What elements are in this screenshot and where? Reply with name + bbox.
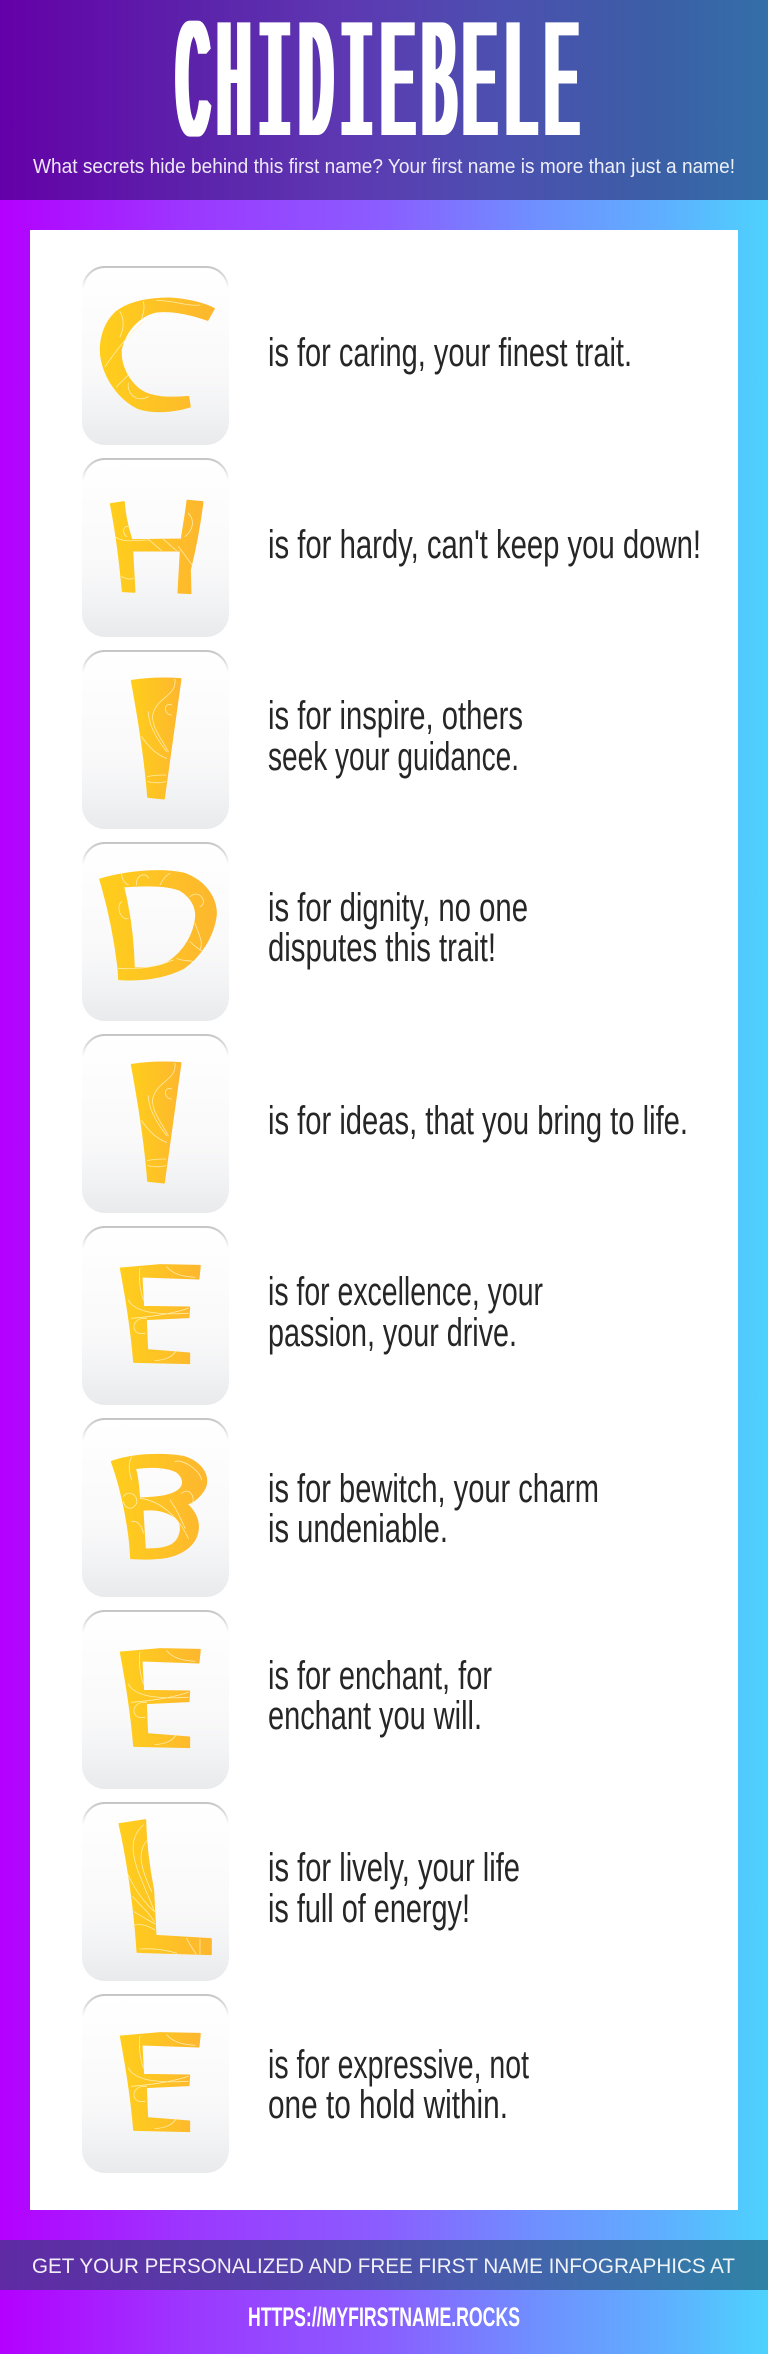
text bbox=[268, 694, 523, 779]
header band bbox=[0, 0, 768, 200]
text: one to hold within. bbox=[268, 2083, 508, 2127]
text bbox=[268, 1270, 543, 1355]
row E bbox=[82, 1611, 492, 1789]
row E bbox=[82, 1227, 543, 1405]
row H bbox=[82, 459, 701, 637]
text: is for excellence, your bbox=[268, 1270, 543, 1314]
footer url: HTTPS://MYFIRSTNAME.ROCKS bbox=[248, 2302, 520, 2332]
row E bbox=[82, 1995, 529, 2173]
card bbox=[82, 651, 229, 829]
text: disputes this trait! bbox=[268, 926, 496, 970]
row B bbox=[82, 1419, 599, 1597]
text: is for caring, your finest trait. bbox=[268, 331, 632, 375]
card bbox=[82, 1803, 229, 1981]
text bbox=[268, 886, 528, 970]
letter H bbox=[111, 501, 203, 593]
card bbox=[82, 1227, 229, 1405]
text bbox=[268, 1654, 492, 1738]
text: is undeniable. bbox=[268, 1507, 448, 1551]
letter I bbox=[132, 678, 181, 799]
row L bbox=[82, 1803, 520, 1981]
card bbox=[82, 1611, 229, 1789]
text: is for expressive, not bbox=[268, 2043, 529, 2087]
card bbox=[82, 1035, 229, 1213]
card bbox=[82, 267, 229, 445]
card bbox=[82, 459, 229, 637]
letter D bbox=[100, 871, 216, 980]
subtitle: What secrets hide behind this first name? Your first name is more than just a name! bbox=[33, 155, 735, 178]
letter E bbox=[121, 2033, 200, 2131]
card bbox=[82, 843, 229, 1021]
card bbox=[82, 1419, 229, 1597]
row D bbox=[82, 843, 528, 1021]
letter L bbox=[119, 1820, 211, 1954]
row C bbox=[82, 267, 632, 445]
text: is for inspire, others bbox=[268, 694, 523, 738]
text: is for dignity, no one bbox=[268, 886, 528, 930]
text bbox=[268, 1467, 599, 1551]
row I bbox=[82, 1035, 688, 1213]
letter C bbox=[101, 298, 214, 411]
footer text: GET YOUR PERSONALIZED AND FREE FIRST NAME INFOGRAPHICS AT bbox=[32, 2254, 735, 2278]
text: is for bewitch, your charm bbox=[268, 1467, 599, 1511]
text: passion, your drive. bbox=[268, 1311, 517, 1355]
text bbox=[268, 2043, 529, 2127]
row I bbox=[82, 651, 523, 829]
text bbox=[268, 1846, 520, 1931]
letter I bbox=[132, 1062, 181, 1183]
letter E bbox=[121, 1649, 200, 1747]
card bbox=[82, 1995, 229, 2173]
text: is full of energy! bbox=[268, 1887, 470, 1931]
text: enchant you will. bbox=[268, 1694, 482, 1738]
text: is for lively, your life bbox=[268, 1846, 520, 1890]
white content panel bbox=[30, 230, 738, 2210]
letter B bbox=[112, 1455, 206, 1559]
letter E bbox=[121, 1265, 200, 1363]
text: is for enchant, for bbox=[268, 1654, 492, 1698]
text: seek your guidance. bbox=[268, 735, 519, 779]
footer band bbox=[0, 2240, 768, 2290]
